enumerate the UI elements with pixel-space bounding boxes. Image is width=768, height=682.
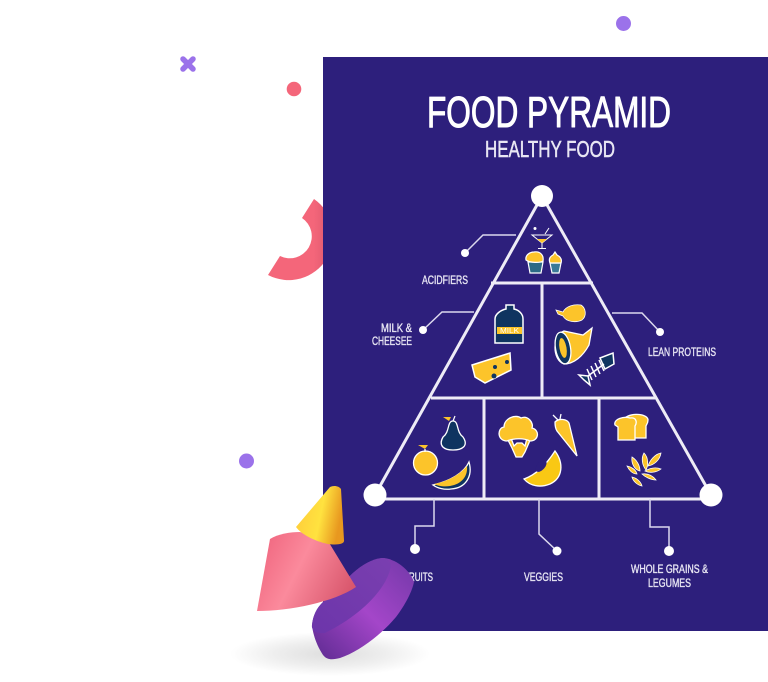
icon: ham	[553, 328, 592, 365]
icon: broccoli	[499, 416, 537, 457]
icon: pink dot	[287, 82, 301, 96]
icon: milk carton: MILK	[500, 328, 519, 335]
pink arc shape	[268, 199, 333, 280]
icon: purple cross	[183, 59, 193, 69]
3d purple disc	[312, 558, 414, 659]
leader: lean proteins	[612, 313, 664, 336]
3d pink cone	[257, 532, 356, 611]
icon: ice cream	[549, 252, 561, 273]
icon: purple dot top	[616, 16, 631, 31]
label: milk and cheese: MILK &	[381, 323, 412, 335]
icon: bread	[615, 414, 648, 440]
label: lean proteins: LEAN PROTEINS	[648, 347, 716, 359]
leader: acidifiers	[461, 235, 516, 257]
icon: pumpkin slice	[524, 451, 561, 486]
label: milk and cheese: CHEESEE	[372, 336, 412, 348]
label: fruits: FRUITS	[404, 572, 433, 584]
leader: veggies	[539, 499, 562, 556]
icon: orange	[414, 445, 438, 475]
icon: chicken leg	[556, 305, 585, 322]
icon: watermelon	[433, 462, 470, 489]
label: acidifiers: ACIDFIERS	[422, 275, 468, 287]
ground shadow	[230, 632, 430, 676]
3d yellow cone	[296, 486, 344, 545]
icon: pear	[441, 416, 465, 450]
pyramid frame	[364, 185, 722, 506]
panel: food pyramid poster	[323, 57, 768, 631]
icon: milk carton	[495, 305, 523, 343]
subtitle: HEALTHY FOOD	[485, 136, 615, 162]
icon: martini	[532, 227, 552, 248]
icon: muffin	[526, 252, 543, 273]
label: whole grains and legumes: WHOLE GRAINS &	[631, 564, 708, 576]
icon: carrot	[553, 414, 577, 456]
title: FOOD PYRAMID	[427, 88, 671, 137]
icon: fish bones	[579, 353, 614, 385]
leader: milk and cheese	[419, 312, 474, 334]
label: whole grains and legumes	[631, 564, 708, 590]
label: milk and cheese	[372, 323, 412, 348]
label: veggies: VEGGIES	[524, 572, 563, 584]
icon: purple dot left	[239, 454, 254, 468]
icon: wheat	[627, 453, 661, 486]
label: whole grains and legumes: LEGUMES	[648, 578, 691, 590]
leader: whole grains	[650, 499, 674, 556]
icon: cheese	[472, 353, 511, 383]
leader: fruits	[410, 499, 434, 554]
